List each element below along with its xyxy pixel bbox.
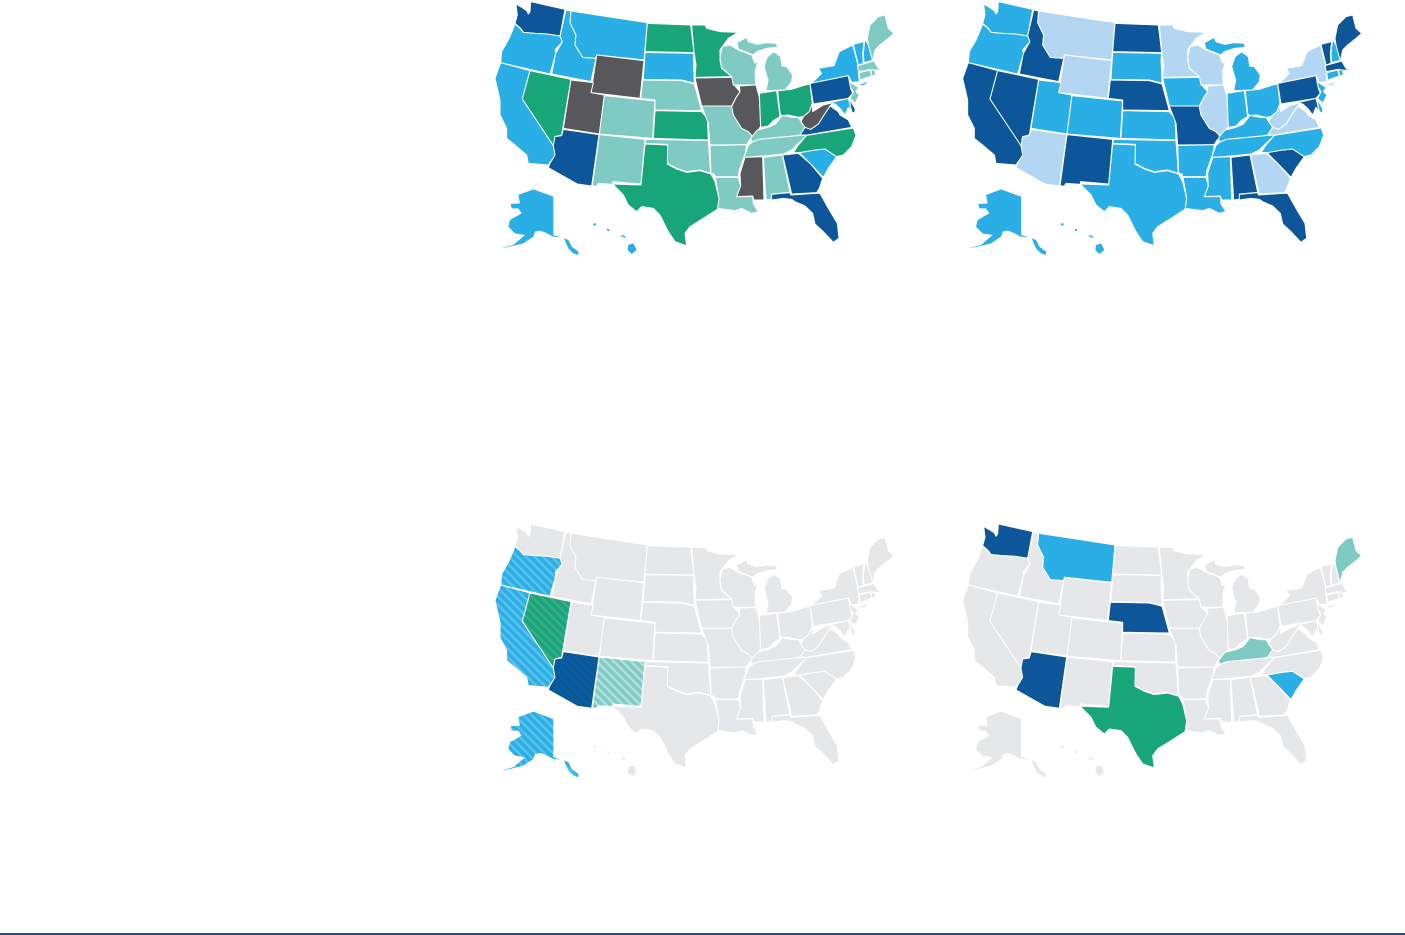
state: Texas xyxy=(1080,666,1187,768)
state: Oregon xyxy=(968,546,1030,596)
state: New Mexico xyxy=(1060,657,1113,708)
state: Hawaii xyxy=(593,746,637,776)
state: Georgia xyxy=(783,676,823,716)
state: Tennessee xyxy=(1212,657,1275,680)
state: New Hampshire xyxy=(1331,39,1342,63)
state: New Jersey xyxy=(1317,604,1327,626)
state: Wisconsin xyxy=(1188,45,1226,85)
state: Montana xyxy=(570,11,647,60)
state: Idaho xyxy=(1019,532,1064,604)
state: Oklahoma xyxy=(645,139,711,173)
map 3: western states hatched, bottom left xyxy=(495,524,894,777)
state: Michigan xyxy=(1204,560,1260,613)
state: Montana xyxy=(1038,533,1115,582)
state: Vermont xyxy=(1321,42,1332,65)
state: Maryland xyxy=(1298,98,1319,115)
state: Utah xyxy=(563,80,604,134)
state: South Dakota xyxy=(1111,52,1162,83)
state: New Jersey xyxy=(1317,82,1327,103)
state: New York xyxy=(810,567,870,608)
state: Virginia xyxy=(1268,106,1319,135)
state: Maryland xyxy=(1298,621,1319,637)
state: Pennsylvania xyxy=(810,598,853,626)
state: Wyoming xyxy=(591,55,644,98)
state: Connecticut xyxy=(859,592,872,602)
state: Kansas xyxy=(1121,633,1176,662)
state: Illinois xyxy=(1199,607,1228,660)
state: Nevada xyxy=(990,593,1039,668)
state: Virginia xyxy=(1268,628,1319,657)
state: Wisconsin xyxy=(1188,567,1226,607)
state: Ohio xyxy=(778,606,812,640)
state: Minnesota xyxy=(692,25,738,77)
state: Georgia xyxy=(1250,676,1290,716)
state: California xyxy=(495,63,556,165)
state: Montana xyxy=(1038,11,1115,60)
state: West Virginia xyxy=(801,102,834,129)
state: Tennessee xyxy=(1212,135,1275,157)
state: Oregon xyxy=(501,546,562,596)
state: Alaska xyxy=(968,189,1046,255)
state: Arkansas xyxy=(710,145,747,177)
state: New Mexico xyxy=(592,657,645,708)
state: Florida xyxy=(772,193,839,242)
map 4: selected states, bottom right xyxy=(963,524,1362,777)
state: South Carolina xyxy=(799,671,837,700)
state: Wyoming xyxy=(1059,55,1112,98)
state: Iowa xyxy=(1163,77,1208,106)
bottom rule xyxy=(0,933,1405,935)
state: Vermont xyxy=(1321,564,1332,587)
state: Washington xyxy=(983,2,1033,36)
state: Alabama xyxy=(763,155,790,200)
state: Nebraska xyxy=(641,602,702,633)
state: Pennsylvania xyxy=(1278,76,1320,104)
state: Indiana xyxy=(1227,613,1248,650)
state: Nebraska xyxy=(1108,80,1169,111)
state: Arkansas xyxy=(1178,667,1214,699)
state: Wisconsin xyxy=(720,567,758,607)
state: West Virginia xyxy=(801,624,834,652)
state: North Dakota xyxy=(1113,23,1162,53)
state: Michigan xyxy=(1204,37,1260,91)
state: Kansas xyxy=(653,111,708,140)
state: New Hampshire xyxy=(863,561,874,585)
state: Missouri xyxy=(1169,628,1221,667)
state: Washington xyxy=(515,524,565,558)
state: Nevada xyxy=(522,593,571,668)
state: Oregon xyxy=(501,24,562,74)
state: Wisconsin xyxy=(720,45,758,85)
state: Florida xyxy=(1239,193,1307,242)
state: Kentucky xyxy=(751,638,805,664)
state: Delaware xyxy=(1317,621,1323,636)
state: Iowa xyxy=(695,77,740,106)
state: Louisiana xyxy=(715,700,758,736)
state: Nevada xyxy=(990,71,1039,146)
state: Kentucky xyxy=(751,115,805,142)
state: Alabama xyxy=(763,677,790,722)
state: Oregon xyxy=(968,24,1030,74)
state: New York xyxy=(810,45,870,86)
state: Arizona xyxy=(548,652,599,708)
state: Maryland xyxy=(830,98,852,115)
state: Alaska xyxy=(500,712,578,777)
state: Tennessee xyxy=(744,135,807,157)
state: Delaware xyxy=(849,98,855,113)
state: Ohio xyxy=(778,84,812,117)
map 2: all states, top right xyxy=(963,2,1362,255)
state: Delaware xyxy=(849,621,855,636)
state: Alabama xyxy=(1231,155,1258,200)
state: Washington xyxy=(515,2,565,36)
state: Colorado xyxy=(1067,96,1123,138)
state: Michigan xyxy=(737,37,793,91)
state: Connecticut xyxy=(1327,70,1339,80)
state: West Virginia xyxy=(1269,624,1302,652)
state: Georgia xyxy=(1250,153,1290,194)
state: Missouri xyxy=(702,628,753,667)
state: New Hampshire xyxy=(863,39,874,63)
state: Louisiana xyxy=(1183,700,1226,736)
state: Ohio xyxy=(1245,84,1280,117)
state: Texas xyxy=(613,666,719,768)
state: Florida xyxy=(1239,715,1307,765)
state: New York xyxy=(1278,45,1338,86)
state: Texas xyxy=(1080,144,1187,246)
state: South Dakota xyxy=(643,575,694,606)
state: Utah xyxy=(1031,80,1072,134)
state: North Dakota xyxy=(645,546,694,575)
state: Massachusetts xyxy=(1325,583,1350,594)
map 1: all states, top left xyxy=(495,2,894,255)
state: Vermont xyxy=(853,564,864,587)
state: New Mexico xyxy=(1060,135,1113,186)
state: California xyxy=(963,585,1023,687)
state: Florida xyxy=(772,715,839,765)
state: Kansas xyxy=(653,633,708,662)
state: Tennessee xyxy=(744,657,807,680)
state: Arkansas xyxy=(1178,145,1214,177)
state: New York xyxy=(1278,567,1338,608)
state: Texas xyxy=(613,144,719,246)
state: Minnesota xyxy=(1159,547,1206,600)
state: Mississippi xyxy=(737,679,764,722)
state: South Dakota xyxy=(643,52,694,83)
state: Oklahoma xyxy=(1113,662,1178,696)
state: Iowa xyxy=(1163,600,1208,628)
state: Connecticut xyxy=(1327,592,1339,602)
state: Utah xyxy=(563,602,604,656)
state: Utah xyxy=(1031,602,1072,656)
state: Louisiana xyxy=(1183,177,1226,213)
state: Missouri xyxy=(702,106,753,145)
state: Pennsylvania xyxy=(1278,598,1320,626)
state: New Mexico xyxy=(592,135,645,186)
state: Illinois xyxy=(732,85,761,137)
state: North Carolina xyxy=(1261,650,1324,679)
state: Arizona xyxy=(548,129,599,186)
state: Oklahoma xyxy=(645,662,711,696)
state: North Dakota xyxy=(1113,546,1162,575)
state: Colorado xyxy=(1067,618,1123,661)
state: Kentucky xyxy=(1218,638,1273,664)
state: California xyxy=(495,585,556,687)
state: Hawaii xyxy=(1061,746,1104,776)
state: South Carolina xyxy=(799,149,837,177)
state: Alabama xyxy=(1231,677,1258,722)
state: South Dakota xyxy=(1111,575,1162,606)
state: Maryland xyxy=(830,621,852,637)
state: Kansas xyxy=(1121,111,1176,140)
state: Ohio xyxy=(1245,606,1280,640)
state: Hawaii xyxy=(1061,223,1104,254)
state: Indiana xyxy=(1227,91,1248,127)
state: Rhode Island xyxy=(871,70,876,76)
state: Virginia xyxy=(800,628,852,657)
state: Nebraska xyxy=(1108,602,1169,633)
state: New Hampshire xyxy=(1331,561,1342,585)
state: Georgia xyxy=(783,153,823,194)
state: Alaska xyxy=(500,189,578,255)
state: Rhode Island xyxy=(871,592,876,598)
state: Colorado xyxy=(599,618,655,661)
state: Wyoming xyxy=(1059,577,1112,621)
state: Virginia xyxy=(800,106,852,135)
state: Illinois xyxy=(1199,85,1228,137)
state: Delaware xyxy=(1317,98,1323,113)
state: Massachusetts xyxy=(1325,61,1350,72)
state: Idaho xyxy=(1019,10,1064,82)
state: Indiana xyxy=(759,613,780,650)
state: Connecticut xyxy=(859,70,872,80)
state: Massachusetts xyxy=(857,583,882,594)
state: Arizona xyxy=(1016,652,1067,708)
state: Wyoming xyxy=(591,577,644,621)
state: Rhode Island xyxy=(1338,592,1343,598)
state: Hawaii xyxy=(593,223,637,254)
state: North Carolina xyxy=(793,650,856,679)
state: Maine xyxy=(1335,15,1362,61)
state: Michigan xyxy=(737,560,793,613)
state: California xyxy=(963,63,1023,165)
state: Arizona xyxy=(1016,129,1067,186)
state: North Carolina xyxy=(793,128,856,157)
state: Kentucky xyxy=(1218,115,1273,142)
state: Nebraska xyxy=(641,80,702,111)
state: South Carolina xyxy=(1267,149,1304,177)
state: Mississippi xyxy=(1204,157,1232,200)
state: New Jersey xyxy=(849,604,859,626)
state: Idaho xyxy=(552,10,596,82)
state: South Carolina xyxy=(1267,671,1304,700)
state: Colorado xyxy=(599,96,655,138)
state: Maine xyxy=(867,537,894,583)
state: Mississippi xyxy=(737,157,764,200)
state: West Virginia xyxy=(1269,102,1302,129)
state: Oklahoma xyxy=(1113,139,1178,173)
state: Arkansas xyxy=(710,667,747,699)
state: North Dakota xyxy=(645,23,694,53)
state: Pennsylvania xyxy=(810,76,853,104)
state: Idaho xyxy=(552,532,596,604)
state: Vermont xyxy=(853,42,864,65)
state: Massachusetts xyxy=(857,61,882,72)
state: Minnesota xyxy=(1159,25,1206,77)
state: Minnesota xyxy=(692,547,738,600)
state: Nevada xyxy=(522,71,571,146)
state: Louisiana xyxy=(715,177,758,213)
state: Alaska xyxy=(968,712,1046,777)
state: Iowa xyxy=(695,600,740,628)
state: Montana xyxy=(570,533,647,582)
state: Indiana xyxy=(759,91,780,127)
state: Maine xyxy=(867,15,894,61)
state: North Carolina xyxy=(1261,128,1324,157)
state: Missouri xyxy=(1169,106,1221,145)
state: Rhode Island xyxy=(1338,70,1343,76)
state: Washington xyxy=(983,524,1033,558)
state: Illinois xyxy=(732,607,761,660)
state: Mississippi xyxy=(1204,679,1232,722)
state: New Jersey xyxy=(849,82,859,103)
state: Maine xyxy=(1335,537,1362,583)
